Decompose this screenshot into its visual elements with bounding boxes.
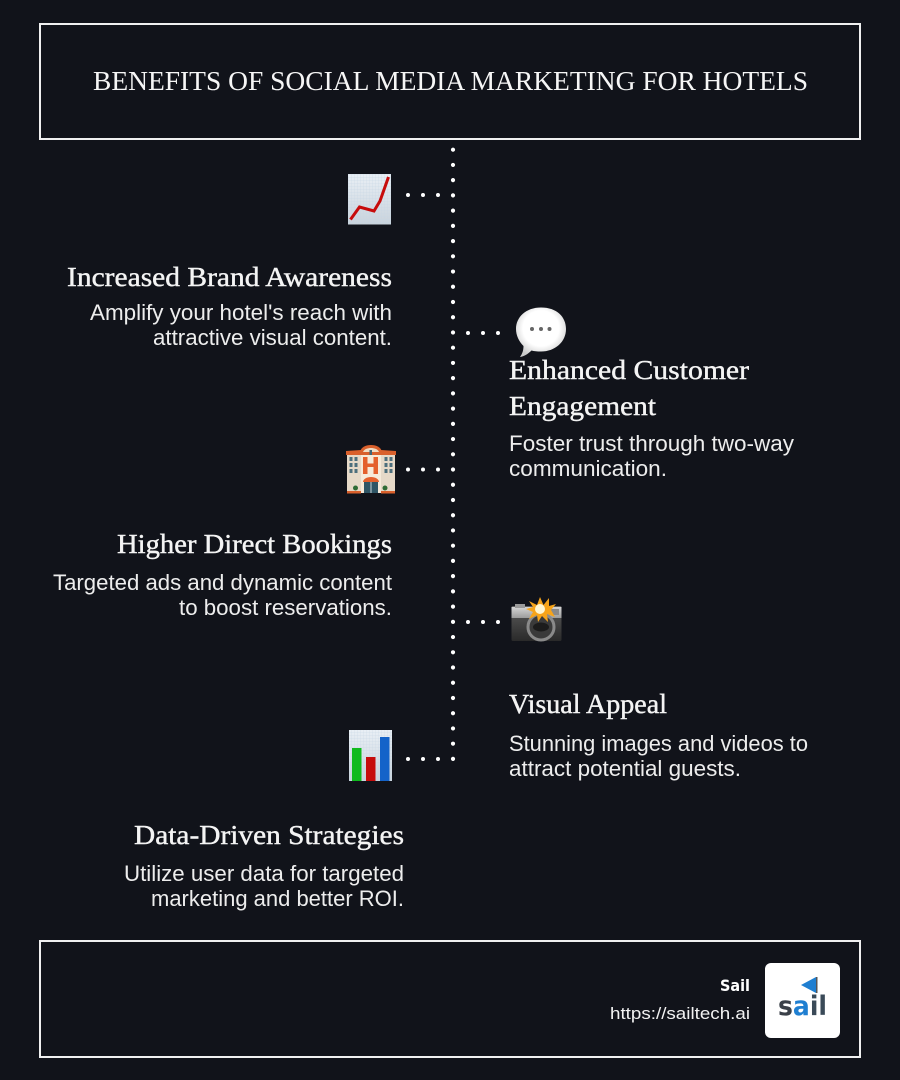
icon: hotel building [346, 445, 396, 494]
benefit: data-driven strategies [124, 730, 445, 911]
heading: Data-Driven Strategies [134, 820, 404, 850]
footer box [40, 941, 860, 1057]
connector dots [468, 620, 505, 624]
description: marketing and better ROI. [151, 886, 404, 911]
website url: https://sailtech.ai [610, 1004, 750, 1023]
description: Amplify your hotel's reach with [90, 300, 392, 325]
dotted timeline spine [451, 150, 455, 760]
description: attract potential guests. [509, 756, 741, 781]
icon: camera with flash [512, 597, 562, 641]
description [124, 861, 404, 911]
benefit: higher direct bookings [53, 445, 445, 620]
benefit: visual appeal [468, 597, 808, 781]
description: Foster trust through two-way [509, 431, 794, 456]
description: Targeted ads and dynamic content [53, 570, 392, 595]
description [53, 570, 392, 620]
connector dots [408, 468, 445, 472]
icon: bar chart [349, 730, 392, 781]
description: Utilize user data for targeted [124, 861, 404, 886]
heading: Increased Brand Awareness [67, 262, 392, 292]
description: Stunning images and videos to [509, 731, 808, 756]
description [509, 731, 808, 781]
heading: Enhanced Customer [509, 355, 749, 385]
title: BENEFITS OF SOCIAL MEDIA MARKETING FOR HOTELS [93, 66, 808, 96]
brand name: Sail [720, 976, 750, 995]
description: attractive visual content. [153, 325, 392, 350]
icon: speech bubble [516, 308, 566, 357]
description [509, 431, 794, 481]
title box [40, 24, 860, 139]
connector dots [408, 193, 445, 197]
heading [509, 355, 749, 421]
description: communication. [509, 456, 667, 481]
heading: Engagement [509, 391, 657, 421]
benefit: enhanced customer engagement [468, 308, 794, 481]
description [90, 300, 392, 350]
description: to boost reservations. [179, 595, 392, 620]
connector dots [408, 757, 445, 761]
heading: Higher Direct Bookings [117, 529, 392, 559]
logo [765, 963, 840, 1038]
benefit: increased brand awareness [67, 174, 445, 350]
heading: Visual Appeal [509, 689, 667, 719]
icon: rising line chart [348, 174, 391, 224]
connector dots [468, 331, 505, 335]
logo: sail [778, 991, 827, 1022]
